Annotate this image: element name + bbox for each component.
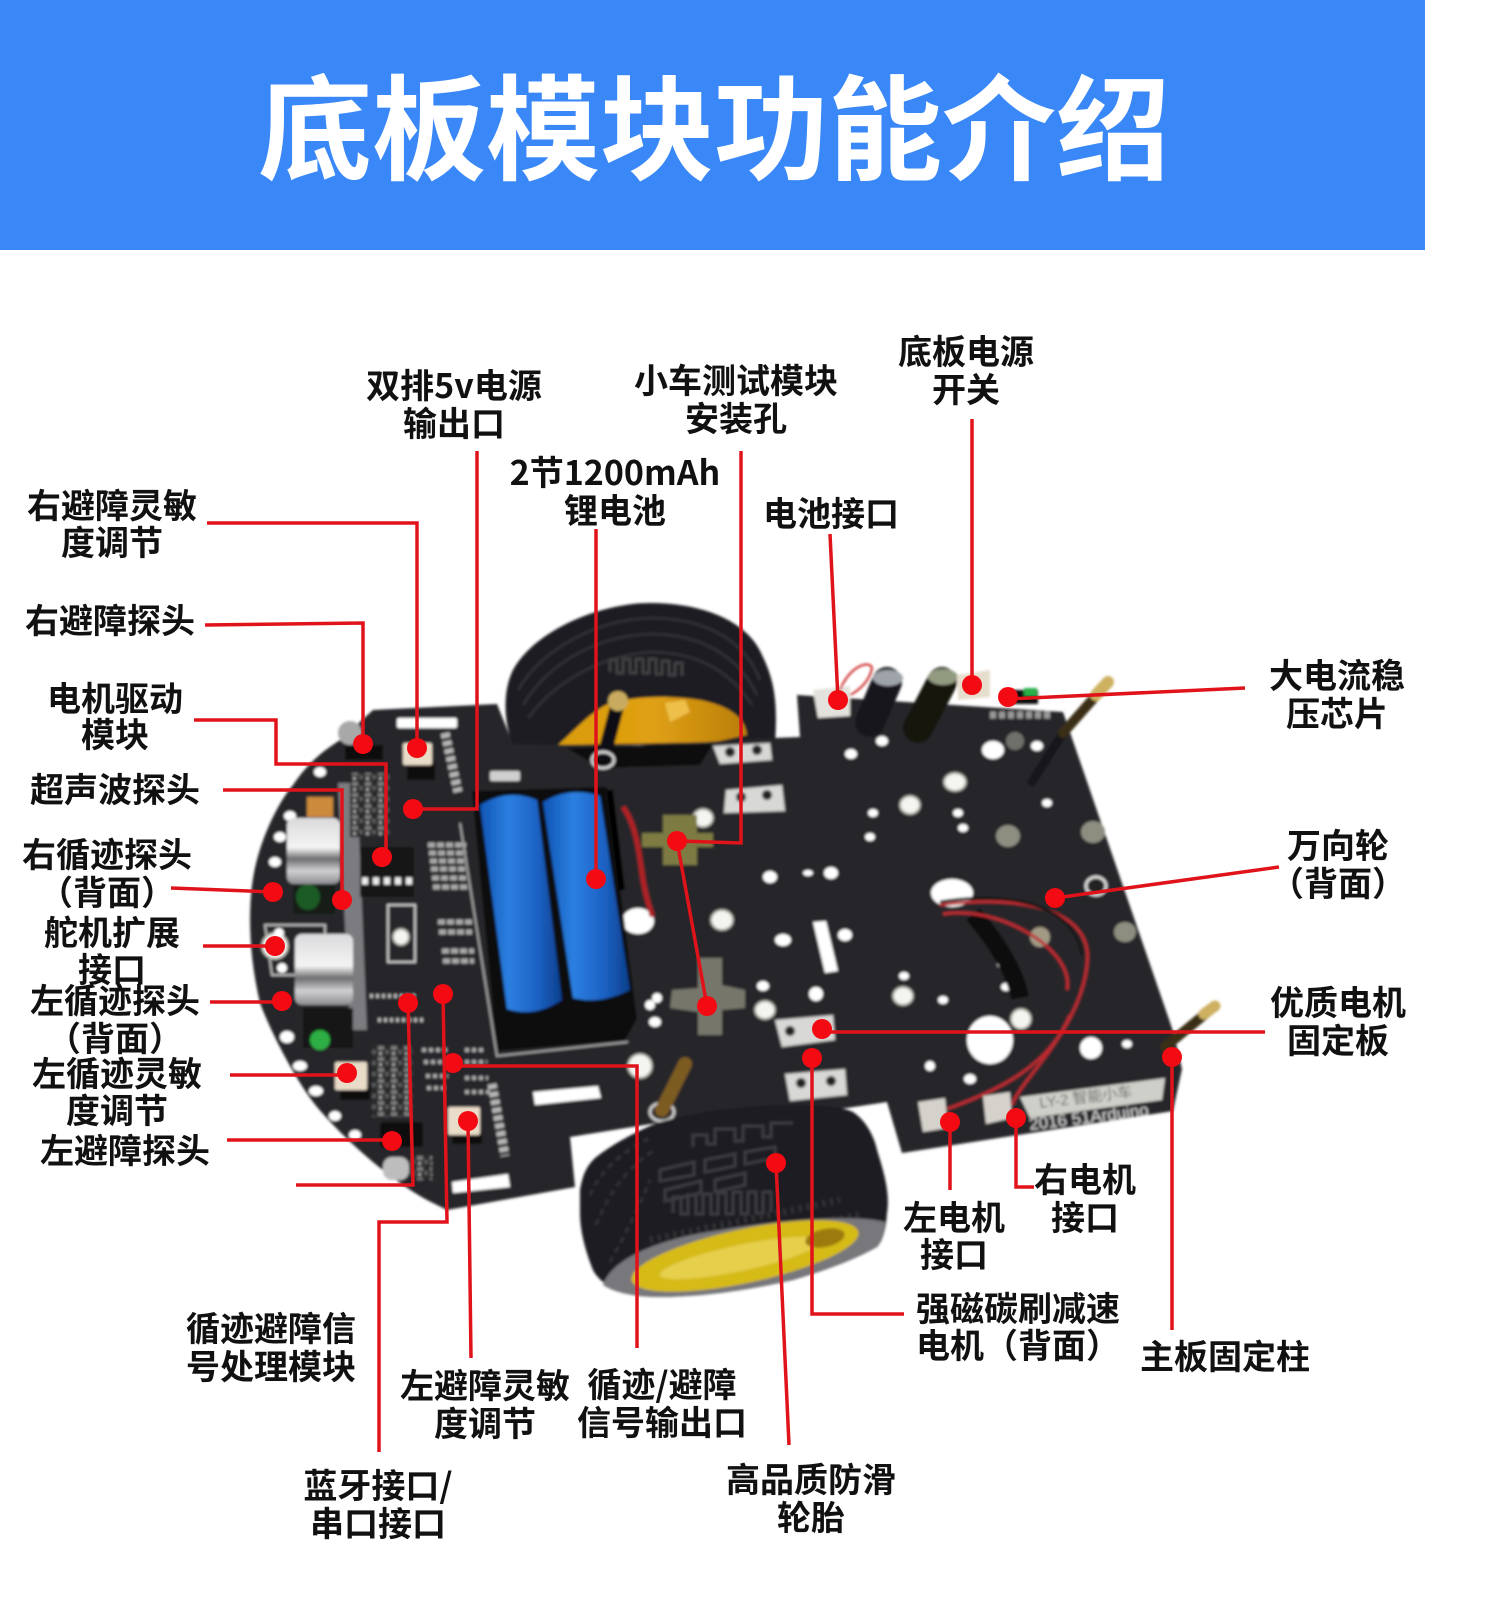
chips and silk print [360, 733, 505, 1156]
callout: 强磁碳刷减速电机（背面） [802, 1048, 1120, 1368]
motor connectors and board label: LY-2 智能小车 [1038, 1083, 1133, 1112]
motor wires [940, 898, 1088, 1109]
callout: 优质电机固定板: 优质电机 [1270, 976, 1406, 1025]
callout: 左避障灵敏度调节: 左避障灵敏 [400, 1359, 570, 1408]
callout: 循迹避障信号处理模块: 号处理模块 [186, 1340, 356, 1389]
battery holder and batteries [460, 787, 652, 1056]
callout: 强磁碳刷减速电机（背面）: 电机（背面） [916, 1319, 1120, 1368]
callout: 大电流稳压芯片: 压芯片 [1286, 687, 1388, 736]
callout: 万向轮（背面）: （背面） [1270, 857, 1406, 906]
callout: 循迹避障信号处理模块 [186, 993, 418, 1389]
callout: 右循迹探头（背面）: 右循迹探头 [22, 828, 192, 877]
callout: 双排5v电源输出口: 双排5v电源 [366, 359, 542, 408]
callout: 舵机扩展接口: 舵机扩展 [44, 906, 180, 955]
callout: 右电机接口: 右电机 [1034, 1153, 1136, 1202]
callout: 底板电源开关: 开关 [932, 363, 1000, 412]
callout: 大电流稳压芯片: 大电流稳 [1269, 649, 1405, 698]
top wheel [506, 603, 776, 746]
motor connectors and board label: 2016 51Arduino [1028, 1100, 1150, 1134]
callout: 双排5v电源输出口 [366, 359, 542, 819]
callout: 优质电机固定板 [812, 976, 1406, 1063]
buttons [335, 743, 482, 1147]
ultrasonic module [262, 721, 432, 1180]
callout: 蓝牙接口/串口接口: 串口接口 [310, 1497, 446, 1546]
callout: 主板固定柱: 主板固定柱 [1140, 1330, 1310, 1379]
callout: 底板电源开关 [898, 325, 1034, 695]
board holes and slots [269, 718, 1136, 1193]
bottom wheel [580, 1105, 888, 1307]
motor connectors and board label [918, 1078, 1165, 1134]
callout: 底板电源开关: 底板电源 [898, 325, 1034, 374]
callout: 循迹/避障信号输出口 [443, 1053, 747, 1445]
callout: 左循迹灵敏度调节: 左循迹灵敏 [32, 1047, 202, 1096]
callout: 右电机接口 [1006, 1108, 1136, 1240]
callout: 电机驱动模块 [47, 672, 392, 867]
callout: 左避障灵敏度调节 [400, 1111, 570, 1446]
callout: 左循迹灵敏度调节: 度调节 [66, 1084, 168, 1133]
callout: 强磁碳刷减速电机（背面）: 强磁碳刷减速 [916, 1282, 1120, 1331]
callout: 电池接口 [763, 487, 899, 710]
callout: 左避障探头: 左避障探头 [40, 1124, 210, 1173]
car photo [250, 603, 1215, 1307]
callout: 电池接口: 电池接口 [763, 487, 899, 536]
callout: 大电流稳压芯片 [998, 649, 1405, 736]
callout: 小车测试模块安装孔: 安装孔 [685, 392, 787, 441]
callout: 左避障灵敏度调节: 度调节 [434, 1397, 536, 1446]
callout: 循迹/避障信号输出口: 信号输出口 [577, 1396, 747, 1445]
callout: 右避障灵敏度调节: 度调节 [61, 516, 163, 565]
circuit board [250, 695, 1182, 1210]
callout: 左电机接口: 左电机 [903, 1191, 1005, 1240]
callout: 2节1200mAh锂电池 [510, 446, 720, 889]
callout: 超声波探头 [30, 763, 352, 910]
callout: 左避障探头 [40, 1124, 402, 1173]
callout: 左电机接口 [903, 1112, 1005, 1277]
callout: 舵机扩展接口: 接口 [78, 943, 146, 992]
callout: 右避障探头: 右避障探头 [25, 594, 195, 643]
callout: 超声波探头: 超声波探头 [30, 763, 200, 812]
callout: 右循迹探头（背面） [22, 828, 283, 915]
wheel shadow on board [567, 744, 713, 768]
callout: 左电机接口: 接口 [920, 1228, 988, 1277]
callout: 右循迹探头（背面）: （背面） [39, 866, 175, 915]
callout: 小车测试模块安装孔 [634, 354, 838, 1016]
callout: 右避障灵敏度调节: 右避障灵敏 [27, 479, 197, 528]
top components [813, 664, 1050, 728]
callout: 高品质防滑轮胎: 轮胎 [777, 1491, 845, 1540]
callout: 2节1200mAh锂电池: 锂电池 [564, 484, 666, 533]
gold cross pads [642, 815, 745, 1035]
callout: 双排5v电源输出口: 输出口 [403, 397, 505, 446]
metal brackets [713, 743, 847, 1101]
callout: 右避障探头 [25, 594, 373, 754]
callout: 万向轮（背面） [1045, 819, 1406, 908]
callout: 左循迹灵敏度调节 [32, 1047, 357, 1133]
callout: 右避障灵敏度调节 [27, 479, 427, 758]
callout: 电机驱动模块: 电机驱动 [47, 672, 183, 721]
callout: 万向轮（背面）: 万向轮 [1287, 819, 1389, 868]
callout: 高品质防滑轮胎: 高品质防滑 [726, 1453, 896, 1502]
callout: 左循迹探头（背面）: （背面） [47, 1012, 183, 1061]
callout: 左循迹探头（背面）: 左循迹探头 [30, 974, 200, 1023]
callout: 左循迹探头（背面） [30, 974, 292, 1061]
callout: 电机驱动模块: 模块 [81, 708, 149, 757]
callout: 循迹避障信号处理模块: 循迹避障信 [186, 1302, 356, 1351]
callout: 蓝牙接口/串口接口: 蓝牙接口/ [303, 1459, 453, 1508]
callout: 蓝牙接口/串口接口 [303, 984, 453, 1546]
callout: 舵机扩展接口 [44, 906, 285, 992]
brass posts [592, 682, 1215, 1121]
callout: 循迹/避障信号输出口: 循迹/避障 [587, 1358, 737, 1407]
title: 底板模块功能介绍 [258, 39, 1170, 204]
title banner [0, 0, 1425, 250]
callout: 右电机接口: 接口 [1051, 1191, 1119, 1240]
callout: 2节1200mAh锂电池: 2节1200mAh [510, 446, 720, 495]
callout: 高品质防滑轮胎 [726, 1153, 896, 1540]
callout: 主板固定柱 [1140, 1047, 1310, 1379]
callout: 小车测试模块安装孔: 小车测试模块 [634, 354, 838, 403]
callout: 优质电机固定板: 固定板 [1287, 1014, 1389, 1063]
